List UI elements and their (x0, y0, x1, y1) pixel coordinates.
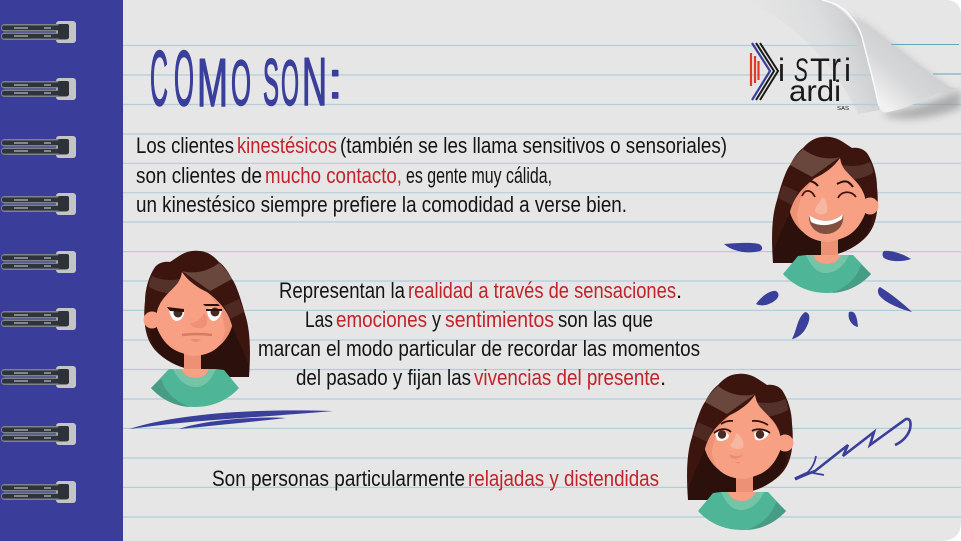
brush rays around smiling woman (724, 243, 912, 339)
intro text block: mucho contacto, (265, 163, 402, 188)
logo wordmark: i (844, 52, 851, 88)
title: C (150, 34, 168, 122)
middle text block: realidad a través de sensaciones (408, 278, 676, 303)
logo wordmark: i (778, 52, 785, 88)
middle text block: . (660, 365, 666, 390)
page curl (822, 0, 961, 119)
icon: serious woman (144, 251, 250, 407)
intro text block: un kinestésico siempre prefiere la comodidad a verse bien. (136, 192, 627, 217)
title: M (197, 45, 228, 121)
middle text block: y (432, 307, 441, 332)
title: : (328, 52, 342, 110)
intro text block: son clientes de (136, 163, 262, 188)
title: O (174, 34, 194, 122)
closing text: relajadas y distendidas (468, 466, 659, 491)
brush underline (129, 410, 333, 429)
title: N (302, 44, 327, 120)
closing text (212, 466, 659, 491)
closing text: Son personas particularmente (212, 466, 465, 491)
title: O (231, 47, 251, 119)
title: S (263, 45, 279, 119)
spiral binding (1, 21, 76, 503)
middle text block: sentimientos (445, 307, 554, 332)
intro text block: Los clientes (136, 133, 234, 158)
middle text block: Las (305, 307, 333, 332)
middle text block: marcan el modo particular de recordar las momentos (258, 336, 700, 361)
middle text block: emociones (336, 307, 427, 332)
logo wordmark: T (810, 52, 830, 88)
logo wordmark: r (831, 43, 841, 90)
intro text block: es gente muy cálida, (406, 163, 552, 188)
logo wordmark: SAS (837, 106, 850, 112)
intro text block: (también se les llama sensitivos o sensoriales) (340, 133, 727, 158)
middle text block: Representan la (279, 278, 406, 303)
middle text block (258, 278, 700, 390)
spine cover (0, 0, 123, 541)
icon: relaxed woman (687, 374, 794, 530)
logo wordmark: S (794, 52, 808, 88)
middle text block: . (676, 278, 682, 303)
intro text block: kinestésicos (237, 133, 337, 158)
middle text block: del pasado y fijan las (296, 365, 471, 390)
intro text block (136, 133, 727, 217)
middle text block: vivencias del presente (474, 365, 660, 390)
logo wordmark: ardi (789, 75, 841, 108)
title: O (281, 47, 299, 119)
logo mark: chevrons (751, 43, 778, 100)
icon: smiling woman (772, 137, 878, 293)
arrow (795, 419, 911, 479)
logo wordmark (778, 43, 851, 112)
title (150, 34, 342, 122)
logo: Distriardi (751, 43, 851, 112)
middle text block: son las que (558, 307, 653, 332)
